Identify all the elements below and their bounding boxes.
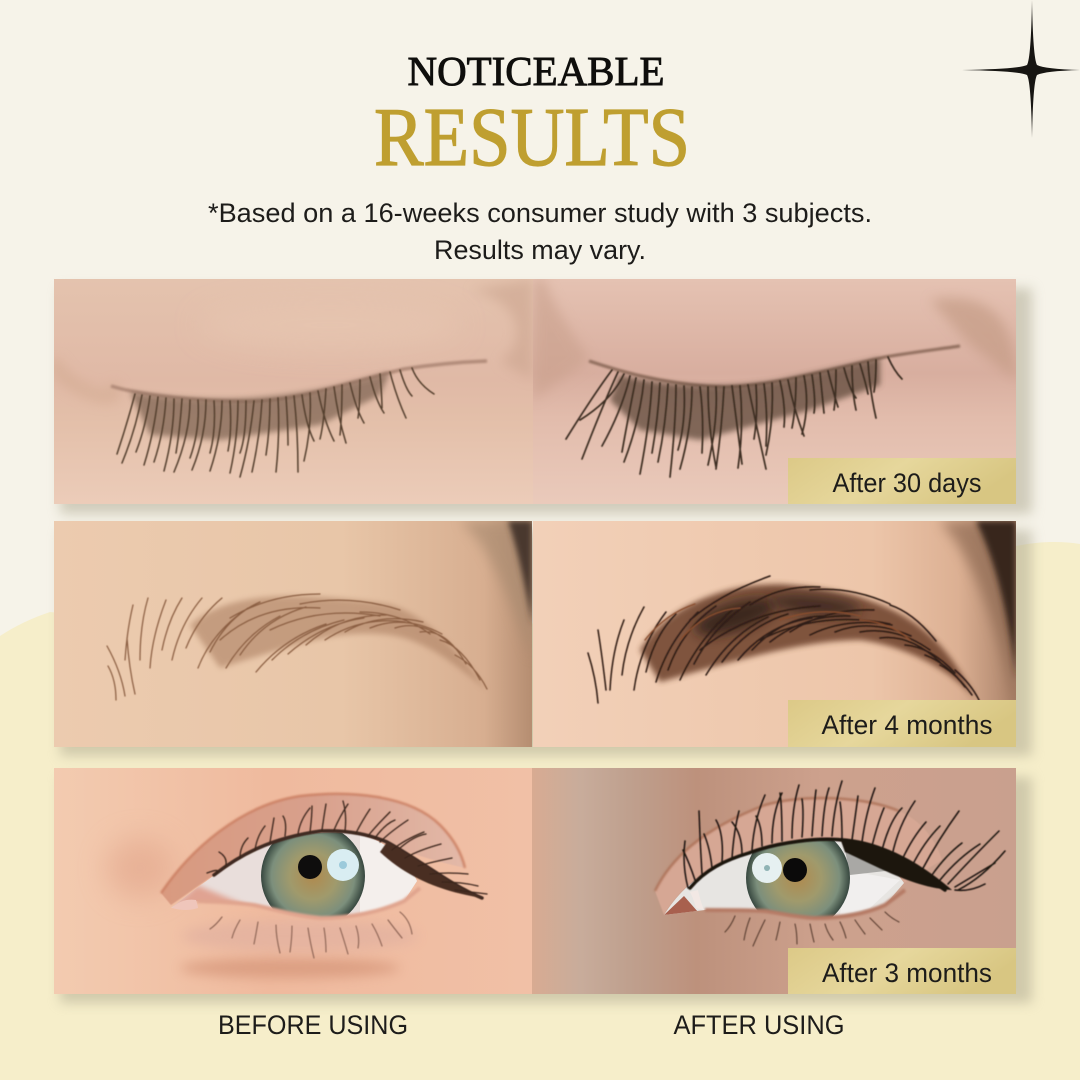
panel: brow after — [533, 521, 1016, 747]
label: after 30 days: After 30 days — [832, 468, 982, 498]
lash mass — [610, 358, 880, 440]
study note: Results may vary. — [434, 235, 646, 265]
lashes — [566, 357, 902, 477]
panel: eye after — [532, 768, 1016, 994]
brow shadow — [190, 596, 487, 690]
upper lid — [655, 798, 942, 915]
caption: after using: AFTER USING — [674, 1010, 844, 1040]
brow mass — [640, 584, 975, 698]
brow hairs — [107, 594, 487, 700]
upper lid — [161, 794, 465, 905]
eye — [171, 832, 421, 920]
lashes — [683, 781, 1005, 946]
label: after 3 months: After 3 months — [822, 958, 992, 988]
decorative star — [962, 0, 1080, 138]
panel: eye before — [54, 768, 532, 994]
label: after 3 months — [788, 948, 1016, 994]
label: after 4 months: After 4 months — [822, 710, 992, 740]
lashes — [117, 368, 434, 477]
panel: lashes before — [54, 279, 533, 504]
heading: results: RESULTS — [374, 91, 690, 184]
panel shadows — [60, 288, 1032, 1003]
study note — [208, 198, 872, 265]
panel: lashes after — [533, 279, 1016, 504]
lashes — [207, 801, 487, 958]
eye — [664, 840, 906, 921]
label: after 30 days — [788, 458, 1016, 504]
panel: brow before — [54, 521, 532, 747]
heading: noticeable: NOTICEABLE — [408, 48, 664, 94]
caption: before using: BEFORE USING — [218, 1010, 408, 1040]
brow hairs — [588, 576, 979, 703]
label: after 4 months — [788, 700, 1016, 747]
study note: *Based on a 16-weeks consumer study with 3 subjects. — [208, 198, 872, 228]
lash mass — [130, 372, 390, 440]
